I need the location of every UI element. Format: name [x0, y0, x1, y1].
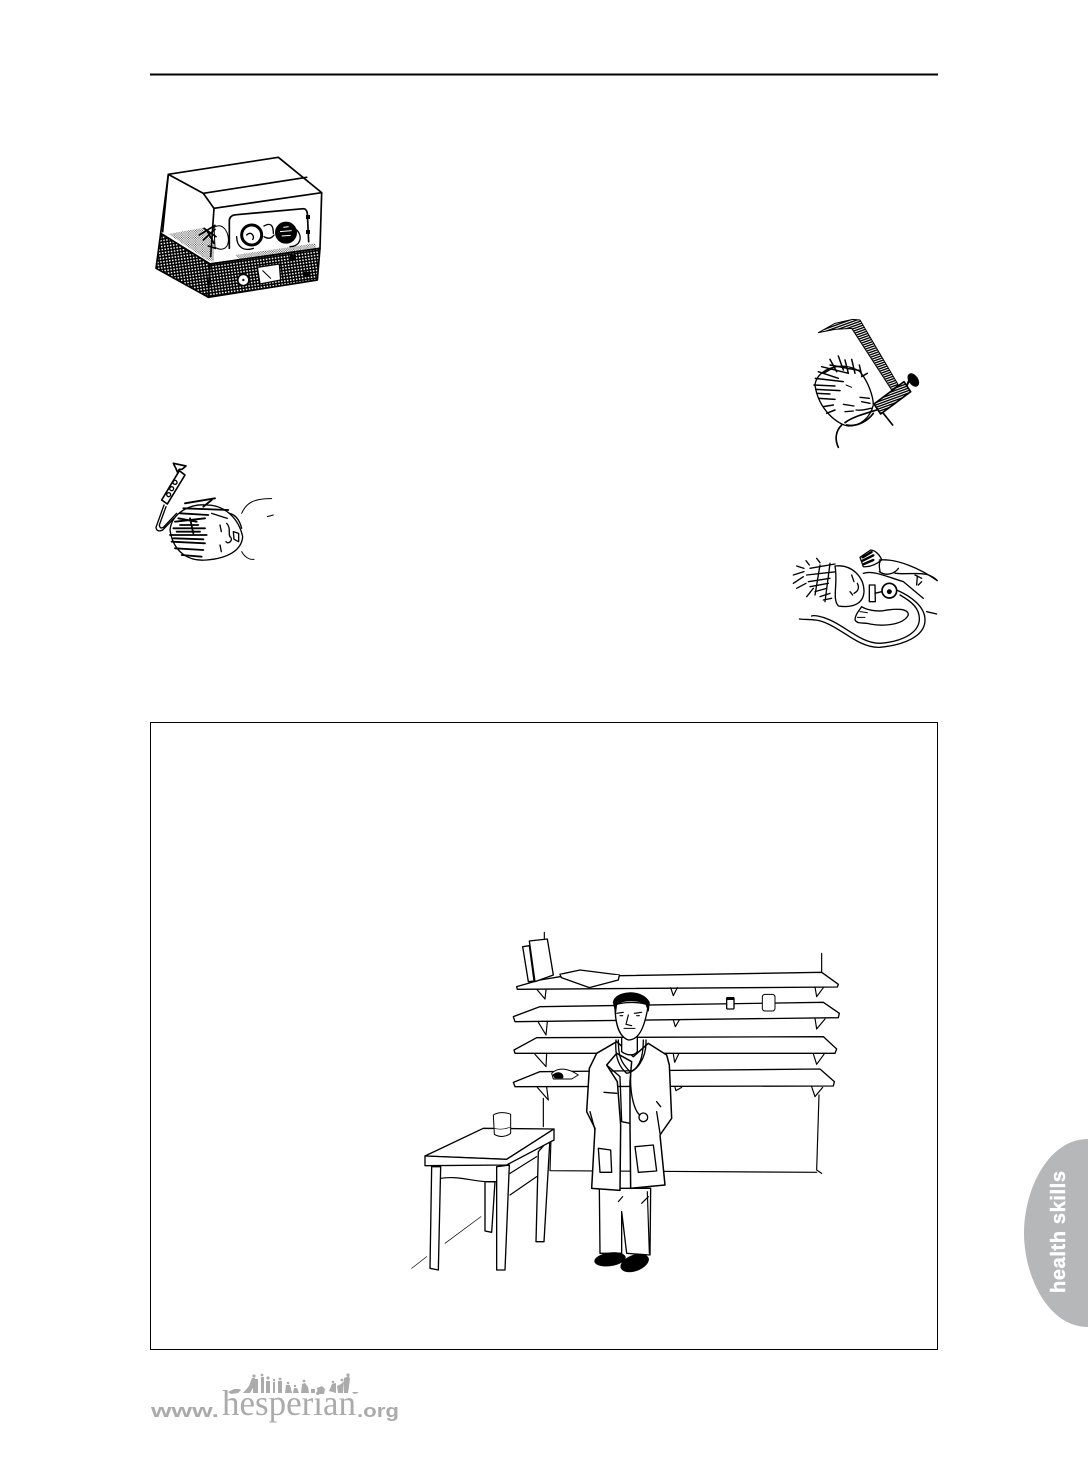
- tubing: [799, 590, 937, 647]
- hair: [170, 498, 228, 557]
- corrugated tube: [818, 319, 898, 390]
- arm: [855, 607, 908, 625]
- mask and stethoscope: [869, 585, 882, 602]
- access window frame: [229, 209, 309, 248]
- incubator base: [156, 233, 210, 297]
- face: [617, 1012, 642, 1026]
- syringe: [162, 471, 185, 504]
- head: [615, 1002, 648, 1055]
- logo: hesperian website: .org: [357, 1401, 399, 1421]
- logo: hesperian website: [150, 1373, 399, 1423]
- wall lines: [543, 932, 822, 1173]
- head: [835, 566, 864, 607]
- illustration: health worker in clinic with shelves and table: [412, 932, 839, 1276]
- mask and tube mouthpiece: [836, 410, 893, 447]
- face: [212, 513, 242, 552]
- lab coat: [587, 1042, 672, 1190]
- panel: clinic box: [150, 722, 938, 1350]
- hair: [814, 356, 867, 413]
- illustration: baby with feeding syringe: [156, 463, 273, 560]
- incubator hood: [161, 157, 322, 264]
- caregiver hand: [860, 550, 882, 567]
- jars on shelf: [727, 998, 734, 1009]
- shoulders and body: [242, 499, 273, 559]
- trousers: [599, 1188, 651, 1255]
- side tab: health skills: [1024, 1139, 1088, 1327]
- head: [815, 366, 873, 426]
- illustration: baby with oxygen tube: [814, 319, 921, 447]
- dial gauge: [257, 264, 281, 284]
- table: [412, 1128, 554, 1270]
- head: [170, 505, 243, 560]
- hair: [613, 993, 649, 1012]
- feeding tube: [156, 505, 177, 531]
- books: [523, 946, 534, 982]
- cup on table: [493, 1113, 511, 1136]
- port holes: [242, 225, 262, 245]
- hair: [793, 558, 837, 602]
- shoes: [594, 1251, 626, 1268]
- shelves: [513, 972, 839, 1100]
- side tab: health skills: health skills: [1048, 1171, 1070, 1293]
- logo text: www.: [150, 1401, 219, 1421]
- header rule: [150, 74, 938, 76]
- cloth on shelf: [552, 1069, 578, 1079]
- control knob: [238, 274, 249, 286]
- illustration: baby with breathing mask: [793, 550, 937, 647]
- logo figures: [228, 1373, 359, 1394]
- logo: hesperian website: hesperian: [222, 1383, 356, 1423]
- stethoscope: [616, 1040, 646, 1117]
- body: [863, 572, 937, 598]
- face: [843, 397, 872, 412]
- incubator mattress: [168, 227, 214, 262]
- baby head in incubator: [214, 226, 228, 249]
- illustration: baby in incubator: [156, 157, 322, 297]
